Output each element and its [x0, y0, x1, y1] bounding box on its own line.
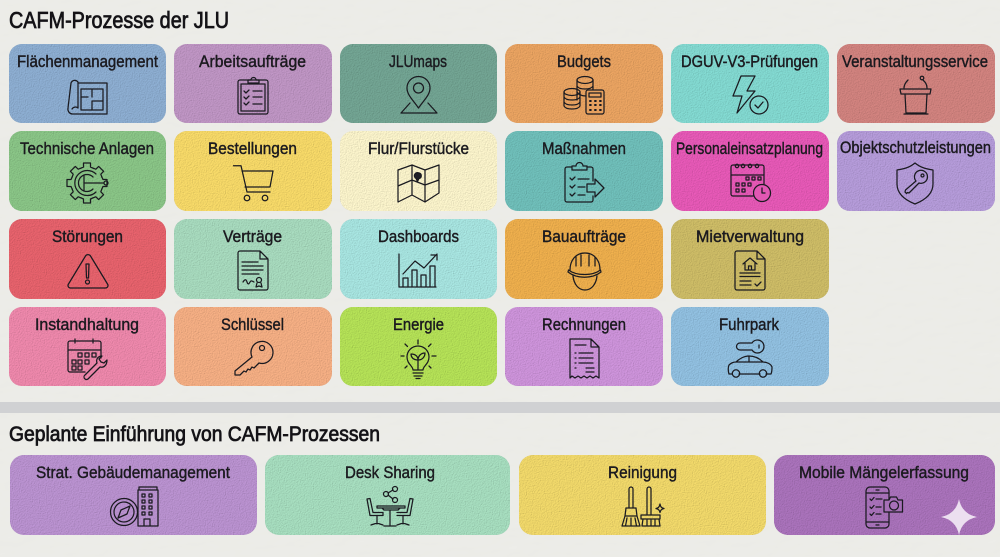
icon: shared desk with chairs — [367, 486, 413, 526]
icon: invoice — [570, 339, 599, 378]
card: Maßnahmen — [505, 131, 663, 211]
icon: calendar with wrench — [68, 339, 107, 380]
label: Desk Sharing: Desk Sharing — [345, 464, 435, 482]
label: Schlüssel: Schlüssel — [221, 316, 284, 334]
card: Flur/Flurstücke — [340, 131, 497, 211]
label: Reinigung: Reinigung — [608, 464, 677, 482]
icon: shopping cart — [234, 166, 273, 201]
card: Dashboards — [340, 219, 497, 299]
label: Personaleinsatzplanung: Personaleinsatzplanung — [676, 140, 823, 158]
label: Flur/Flurstücke: Flur/Flurstücke — [368, 140, 469, 158]
label: Instandhaltung: Instandhaltung — [35, 316, 139, 334]
icon: shield with key — [897, 163, 933, 204]
card: Störungen — [9, 219, 166, 299]
icon: lectern — [900, 76, 931, 114]
label: Fuhrpark: Fuhrpark — [719, 316, 780, 334]
label: Bauaufträge: Bauaufträge — [542, 228, 626, 246]
label: Energie: Energie — [393, 316, 444, 334]
label: Veranstaltungsservice: Veranstaltungsservice — [842, 53, 988, 71]
label: Rechnungen: Rechnungen — [542, 316, 626, 334]
label: Bestellungen: Bestellungen — [208, 140, 297, 158]
icon: floor plan — [68, 80, 107, 114]
card: Arbeitsaufträge — [174, 44, 332, 123]
icon: sparkle — [941, 499, 977, 535]
card: Mietverwaltung — [671, 219, 829, 299]
icon: compass and building — [110, 487, 158, 526]
card: Energie — [340, 307, 497, 386]
card: Veranstaltungsservice — [837, 44, 995, 123]
card: Technische Anlagen — [9, 131, 166, 211]
label: Dashboards: Dashboards — [378, 228, 459, 246]
icon: phone with camera — [866, 487, 902, 528]
icon: bar chart with rising arrow — [399, 254, 437, 287]
card: Budgets — [505, 44, 663, 123]
title: CAFM-Prozesse der JLU: CAFM-Prozesse der JLU — [9, 7, 229, 33]
label: Verträge: Verträge — [223, 228, 282, 246]
icon: calendar with clock — [731, 164, 770, 202]
icon: key — [235, 341, 273, 375]
icon: clipboard with arrow — [565, 162, 604, 202]
icon: map pin — [401, 76, 437, 113]
icon: rental document with house — [735, 251, 765, 290]
icon: lightning bolt with check — [733, 76, 768, 114]
icon: car and key — [728, 340, 772, 377]
card: Desk Sharing — [265, 455, 510, 535]
icon: signed contract — [238, 251, 268, 290]
label: Flächenmanagement: Flächenmanagement — [17, 53, 158, 71]
icon: clipboard checklist — [238, 78, 268, 114]
card: Personaleinsatzplanung — [671, 131, 829, 211]
card: Objektschutzleistungen — [837, 131, 995, 211]
label: Arbeitsaufträge: Arbeitsaufträge — [199, 53, 306, 71]
icon: gear circuit — [67, 163, 108, 203]
label: Mobile Mängelerfassung: Mobile Mängelerfassung — [799, 464, 969, 482]
icon: warning triangle — [68, 255, 108, 288]
icon: coins and calculator — [564, 76, 604, 114]
card: Verträge — [174, 219, 332, 299]
icon: hard hat — [568, 253, 601, 290]
label: DGUV-V3-Prüfungen: DGUV-V3-Prüfungen — [681, 53, 818, 71]
card: Instandhaltung — [9, 307, 166, 386]
label: Strat. Gebäudemanagement: Strat. Gebäudemanagement — [36, 464, 230, 482]
label: Mietverwaltung: Mietverwaltung — [696, 228, 804, 246]
label: Störungen: Störungen — [52, 228, 123, 246]
label: JLUmaps: JLUmaps — [389, 53, 447, 71]
icon: folded map — [398, 165, 439, 202]
icon: light bulb with leaves — [401, 340, 436, 378]
label: Budgets: Budgets — [557, 53, 611, 71]
card: Schlüssel — [174, 307, 332, 386]
card: Fuhrpark — [671, 307, 829, 386]
card: Bauaufträge — [505, 219, 663, 299]
card: Strat. Gebäudemanagement — [10, 455, 257, 535]
icon: broom and brush — [622, 487, 664, 526]
card: Flächenmanagement — [9, 44, 166, 123]
label: Maßnahmen: Maßnahmen — [542, 140, 626, 158]
card: Reinigung — [519, 455, 766, 535]
card: Mobile Mängelerfassung — [774, 455, 995, 535]
card: Bestellungen — [174, 131, 332, 211]
card: JLUmaps — [340, 44, 497, 123]
card: Rechnungen — [505, 307, 663, 386]
card: DGUV-V3-Prüfungen — [671, 44, 829, 123]
label: Technische Anlagen: Technische Anlagen — [20, 140, 154, 158]
heading: Geplante Einführung von CAFM-Prozessen: Geplante Einführung von CAFM-Prozessen — [9, 422, 380, 446]
